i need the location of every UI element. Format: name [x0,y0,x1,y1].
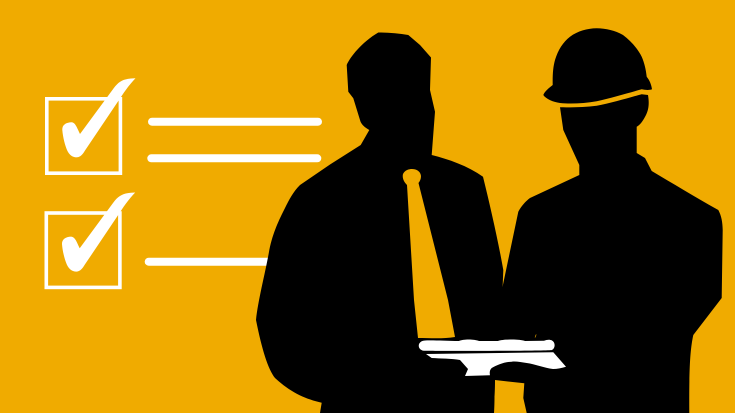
small highlight near hand [535,334,536,338]
first long line [152,118,318,126]
third line [149,258,285,266]
figure: businessman silhouette [256,32,503,413]
hard hat [543,28,652,103]
icon: first checkbox [47,99,120,173]
icon: first check mark [62,78,136,157]
panel: checklist [46,78,318,287]
engineer body [480,94,723,413]
icon: second check mark [62,192,135,272]
figure: engineer silhouette [480,28,723,413]
tablet lower surface [426,352,566,376]
necktie [403,169,455,338]
second long line [151,154,317,162]
tablet top edge [419,340,555,351]
tablet [419,340,566,376]
icon: second checkbox [46,213,120,287]
